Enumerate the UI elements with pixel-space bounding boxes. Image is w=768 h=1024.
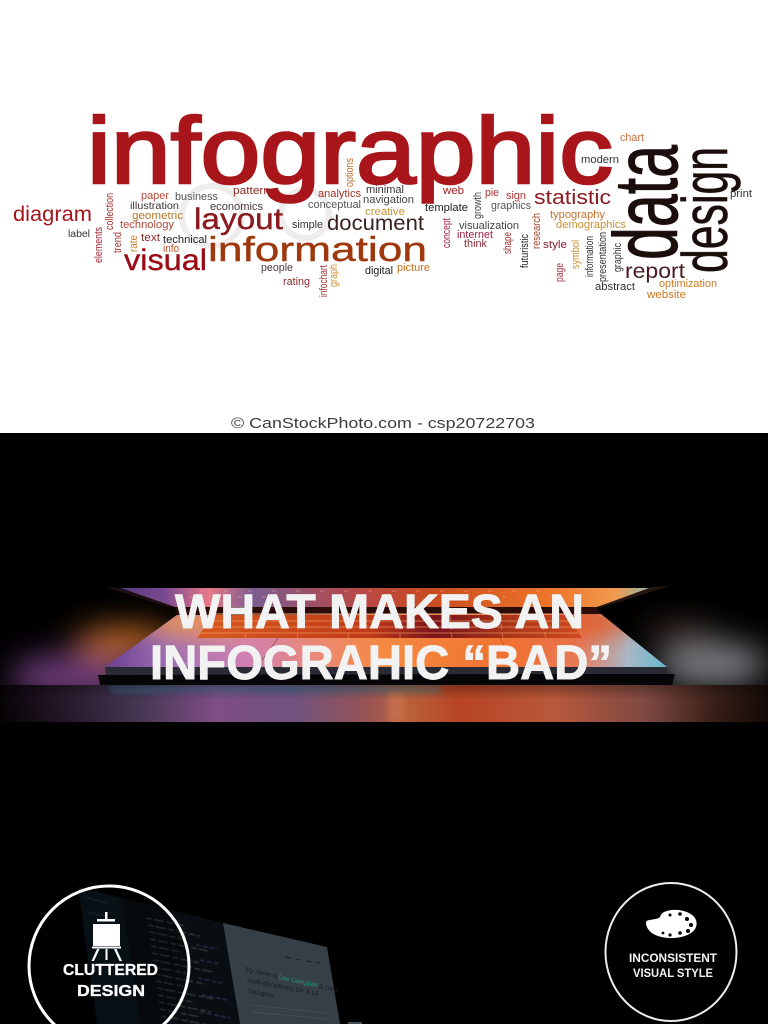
small words: pattern bbox=[233, 185, 270, 197]
small words: chart bbox=[620, 132, 644, 144]
small words: graphic bbox=[612, 243, 624, 272]
small words: template bbox=[425, 202, 468, 214]
small words: layout bbox=[194, 203, 284, 236]
laptop photo bbox=[0, 586, 768, 722]
website screen: Designer. bbox=[248, 988, 276, 1000]
screen reflected keys bbox=[190, 591, 580, 597]
badge ellipse bbox=[606, 883, 736, 1021]
small words: concept bbox=[441, 218, 453, 248]
small words: technology bbox=[120, 219, 174, 231]
badge label: CLUTTERED bbox=[63, 962, 158, 979]
website screen bbox=[223, 923, 340, 1024]
badge: inconsistent visual style bbox=[606, 883, 736, 1021]
title: INFOGRAHIC “BAD” bbox=[150, 637, 612, 690]
small words: information bbox=[584, 236, 596, 277]
small words: economics bbox=[210, 201, 264, 213]
small words: rating bbox=[283, 276, 310, 288]
small words bbox=[13, 132, 752, 301]
watermark bbox=[182, 186, 329, 246]
small words: pie bbox=[485, 187, 499, 199]
right glow bbox=[644, 625, 768, 686]
hinge bbox=[175, 607, 601, 615]
website screen: My name is Lee Campbell & I'm a bbox=[245, 966, 339, 994]
base colour highlights bbox=[140, 608, 635, 636]
small words: page bbox=[554, 263, 566, 282]
small words: report bbox=[625, 260, 685, 283]
word cloud bbox=[13, 98, 752, 301]
main word: infographic: infographic bbox=[87, 98, 613, 203]
small words: illustration bbox=[130, 201, 179, 212]
small words: graph bbox=[328, 264, 340, 287]
small words: document bbox=[327, 212, 424, 235]
small words: minimal bbox=[366, 184, 404, 196]
stock photo credit: © CanStockPhoto.com - csp20722703 bbox=[231, 415, 535, 432]
badge label: INCONSISTENT bbox=[629, 951, 718, 965]
small words: diagram bbox=[13, 203, 92, 226]
small words: visual bbox=[124, 244, 207, 277]
small words: graphics bbox=[491, 200, 531, 212]
small words: label bbox=[68, 229, 90, 240]
small words: creative bbox=[365, 206, 405, 218]
small words: text bbox=[141, 232, 160, 244]
small words: demographics bbox=[556, 219, 627, 231]
small words: internet bbox=[457, 229, 493, 241]
small words: presentation bbox=[597, 232, 609, 282]
white word cloud background bbox=[0, 0, 768, 433]
small words: symbol bbox=[570, 240, 582, 269]
vertical word: data: data bbox=[597, 144, 697, 260]
badge label bbox=[63, 962, 158, 1000]
small words: simple bbox=[292, 219, 323, 231]
small words: optimization bbox=[659, 278, 717, 290]
small words: navigation bbox=[363, 194, 414, 206]
badge circle bbox=[29, 886, 189, 1024]
small words: technical bbox=[163, 234, 207, 246]
laptop screen bbox=[120, 588, 652, 607]
small words: think bbox=[464, 238, 487, 250]
small words: picture bbox=[397, 262, 430, 274]
small words: abstract bbox=[595, 281, 635, 293]
small words: conceptual bbox=[308, 199, 361, 211]
title: WHAT MAKES AN bbox=[175, 586, 584, 639]
small words: print bbox=[730, 188, 752, 200]
small words: infochart bbox=[318, 265, 330, 297]
badge label: DESIGN bbox=[77, 983, 145, 1000]
badge: cluttered design bbox=[29, 886, 189, 1024]
small words: paper bbox=[141, 190, 169, 202]
small words: elements bbox=[93, 227, 105, 263]
small words: collection bbox=[104, 193, 116, 230]
small words: website bbox=[646, 289, 686, 301]
small words: options bbox=[344, 158, 356, 187]
website screen: multi-disciplinary UX & UI bbox=[247, 977, 319, 998]
small words: typography bbox=[550, 209, 605, 221]
small words: digital bbox=[365, 265, 393, 277]
badge label bbox=[629, 951, 718, 980]
small words: info bbox=[163, 243, 179, 255]
left glow bbox=[10, 628, 175, 702]
laptop base bbox=[105, 614, 667, 667]
code editor screen bbox=[78, 887, 240, 1024]
small words: people bbox=[261, 262, 293, 274]
trackpad outline bbox=[262, 638, 278, 660]
small words: information bbox=[208, 231, 427, 269]
icon: easel bbox=[92, 912, 122, 961]
second laptop photo bbox=[78, 887, 362, 1024]
small words: futuristic bbox=[519, 234, 531, 268]
icon: palette bbox=[646, 910, 697, 938]
table reflection bbox=[0, 685, 768, 722]
small words: growth bbox=[472, 192, 484, 219]
small words: shape bbox=[502, 232, 514, 254]
small words: sign bbox=[506, 190, 526, 202]
small words: geometric bbox=[132, 210, 184, 222]
small words: visualization bbox=[459, 220, 519, 232]
badge label: VISUAL STYLE bbox=[633, 966, 713, 980]
title bbox=[150, 586, 612, 690]
small words: style bbox=[543, 239, 567, 251]
small words: business bbox=[175, 191, 218, 203]
laptop front edge bbox=[105, 667, 668, 675]
black background panel bbox=[0, 433, 768, 1024]
vertical word: design: design bbox=[669, 147, 741, 273]
small words: trend bbox=[112, 232, 124, 253]
small words: rate bbox=[128, 235, 140, 252]
small words: analytics bbox=[318, 188, 362, 200]
small words: modern bbox=[581, 154, 619, 166]
small words: statistic bbox=[534, 187, 611, 209]
small words: research bbox=[531, 213, 543, 249]
keyboard bbox=[197, 615, 582, 638]
small words: web bbox=[442, 185, 464, 197]
